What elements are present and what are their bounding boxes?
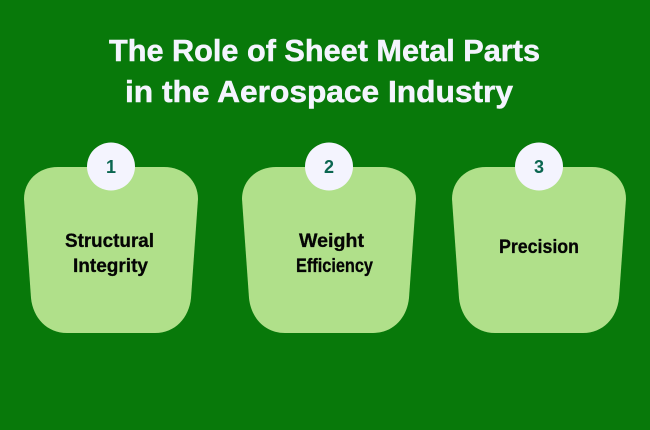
title (109, 33, 540, 109)
label: Weight Efficiency: Weight (299, 230, 365, 252)
label: Weight Efficiency: Efficiency (296, 255, 373, 277)
panel: Structural Integrity (24, 167, 198, 333)
label: Precision: Precision (499, 236, 579, 258)
badge: number 3: 3 (534, 157, 544, 177)
label: Structural Integrity: Integrity (73, 255, 148, 277)
badge: number 3 (515, 142, 563, 190)
title: The Role of Sheet Metal Parts (109, 33, 540, 68)
label: Structural Integrity: Structural (65, 230, 154, 252)
badge: number 2: 2 (324, 157, 334, 177)
panel: Weight Efficiency (242, 167, 416, 333)
title: in the Aerospace Industry (125, 74, 514, 109)
label: Structural Integrity (65, 230, 154, 277)
panel: Precision (452, 167, 626, 333)
badge: number 2 (305, 142, 353, 190)
badge: number 1: 1 (106, 157, 116, 177)
label: Weight Efficiency (296, 230, 373, 277)
badge: number 1 (87, 142, 135, 190)
